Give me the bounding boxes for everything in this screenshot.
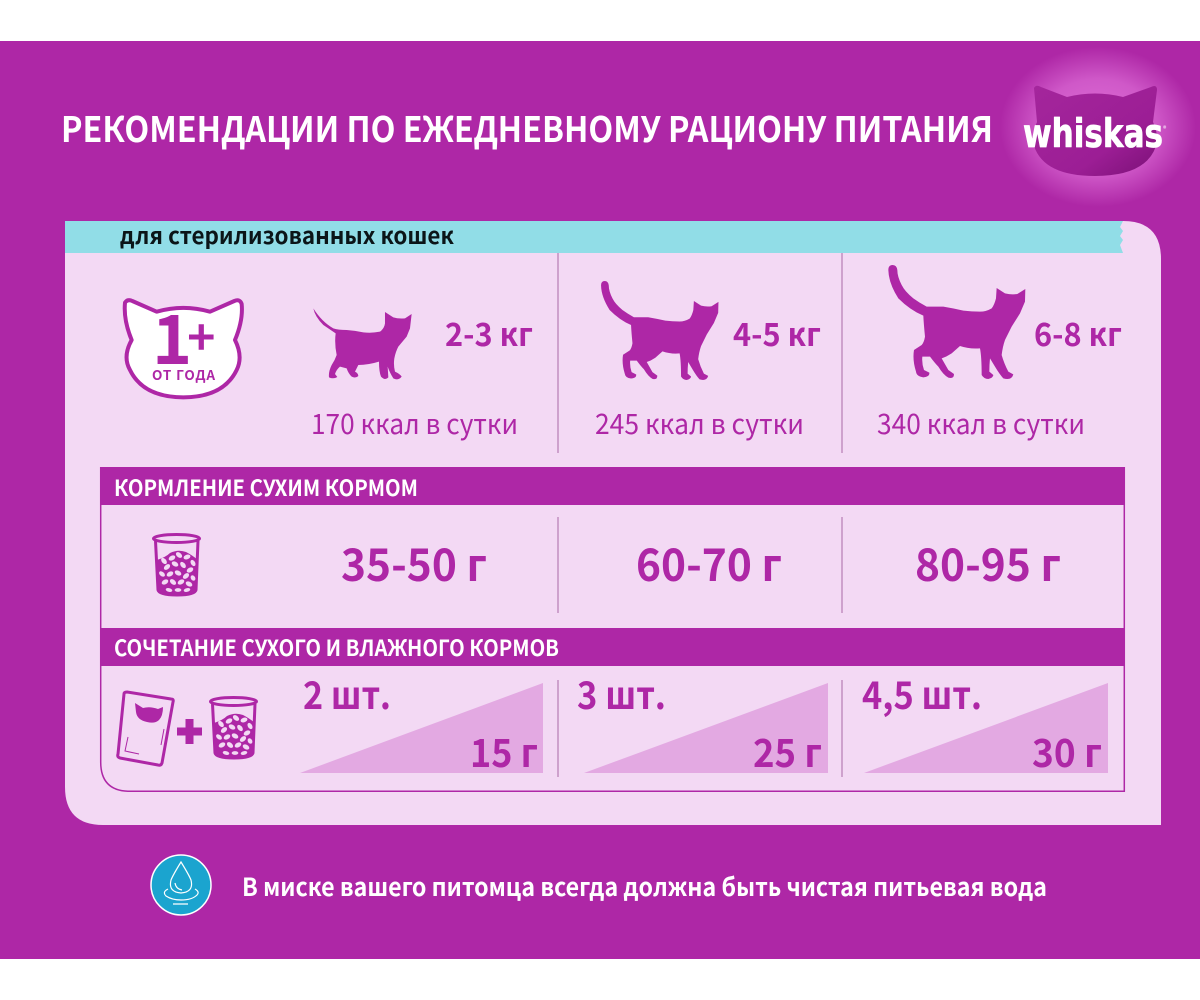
- icon: age badge 1+: 1: [152, 285, 192, 384]
- value: dry 35-50 g: 35-50 г: [341, 529, 487, 594]
- text: calories 340: 340 ккал в сутки: [877, 403, 1085, 443]
- icon: plus: [177, 719, 202, 744]
- mixed column 3: 4,5 pouches and 30 g: 30 г: [1032, 723, 1102, 779]
- mixed column 3: 4,5 pouches and 30 g: [862, 665, 1108, 779]
- logo: whiskas: whiskas: [1023, 112, 1163, 157]
- logo: whiskas: ®: [1163, 124, 1167, 134]
- text: calories 170: 170 ккал в сутки: [311, 403, 518, 443]
- icon: cat 6-8 kg: [888, 265, 1025, 379]
- value: dry 60-70 g: 60-70 г: [636, 529, 782, 594]
- text: weight 2-3 kg: 2-3 кг: [445, 310, 533, 356]
- icon: second cup of dry food: [210, 698, 256, 758]
- mixed column 3: 4,5 pouches and 30 g: 4,5 шт.: [862, 665, 982, 720]
- column dividers: [558, 253, 842, 777]
- ribbon label: для стерилизованных кошек: [120, 217, 454, 251]
- header bar: dry food: КОРМЛЕНИЕ СУХИМ КОРМОМ: [114, 471, 418, 503]
- header bar: mixed food: СОЧЕТАНИЕ СУХОГО И ВЛАЖНОГО КОРМОВ: [114, 631, 559, 663]
- mixed column 2: 3 pouches and 25 g: 3 шт.: [577, 665, 666, 720]
- icon: age badge 1+: +: [187, 299, 215, 369]
- mixed column 1: 2 pouches and 15 g: 2 шт.: [303, 665, 391, 720]
- icon: wet food pouch: [118, 692, 173, 765]
- icon: water drop: [151, 855, 211, 915]
- icon: cup of dry food: [154, 534, 200, 595]
- mixed column 2: 3 pouches and 25 g: 25 г: [753, 723, 822, 779]
- text: weight 4-5 kg: 4-5 кг: [733, 310, 821, 356]
- mixed column 2: 3 pouches and 25 g: [577, 665, 828, 779]
- mixed column 1: 2 pouches and 15 g: [300, 665, 543, 779]
- logo: whiskas: [1000, 47, 1196, 207]
- footer text: В миске вашего питомца всегда должна быть чистая питьевая вода: [242, 868, 1047, 904]
- mixed column 1: 2 pouches and 15 g: 15 г: [470, 723, 538, 779]
- icon: age badge 1+: [125, 285, 242, 397]
- table frame: [101, 468, 1124, 791]
- title: РЕКОМЕНДАЦИИ ПО ЕЖЕДНЕВНОМУ РАЦИОНУ ПИТАНИЯ: [61, 102, 993, 153]
- panel: feeding recommendations: [65, 217, 1161, 825]
- header bar: mixed food: [100, 628, 1125, 666]
- icon: age badge 1+: ОТ ГОДА: [152, 364, 215, 384]
- text: calories 245: 245 ккал в сутки: [595, 403, 804, 443]
- icon: cat 4-5 kg: [601, 281, 718, 380]
- header bar: dry food: [100, 467, 1125, 505]
- icon: kitten 2-3 kg: [313, 308, 412, 379]
- text: weight 6-8 kg: 6-8 кг: [1034, 310, 1122, 356]
- value: dry 80-95 g: 80-95 г: [915, 529, 1061, 594]
- teal ribbon: [65, 221, 1123, 253]
